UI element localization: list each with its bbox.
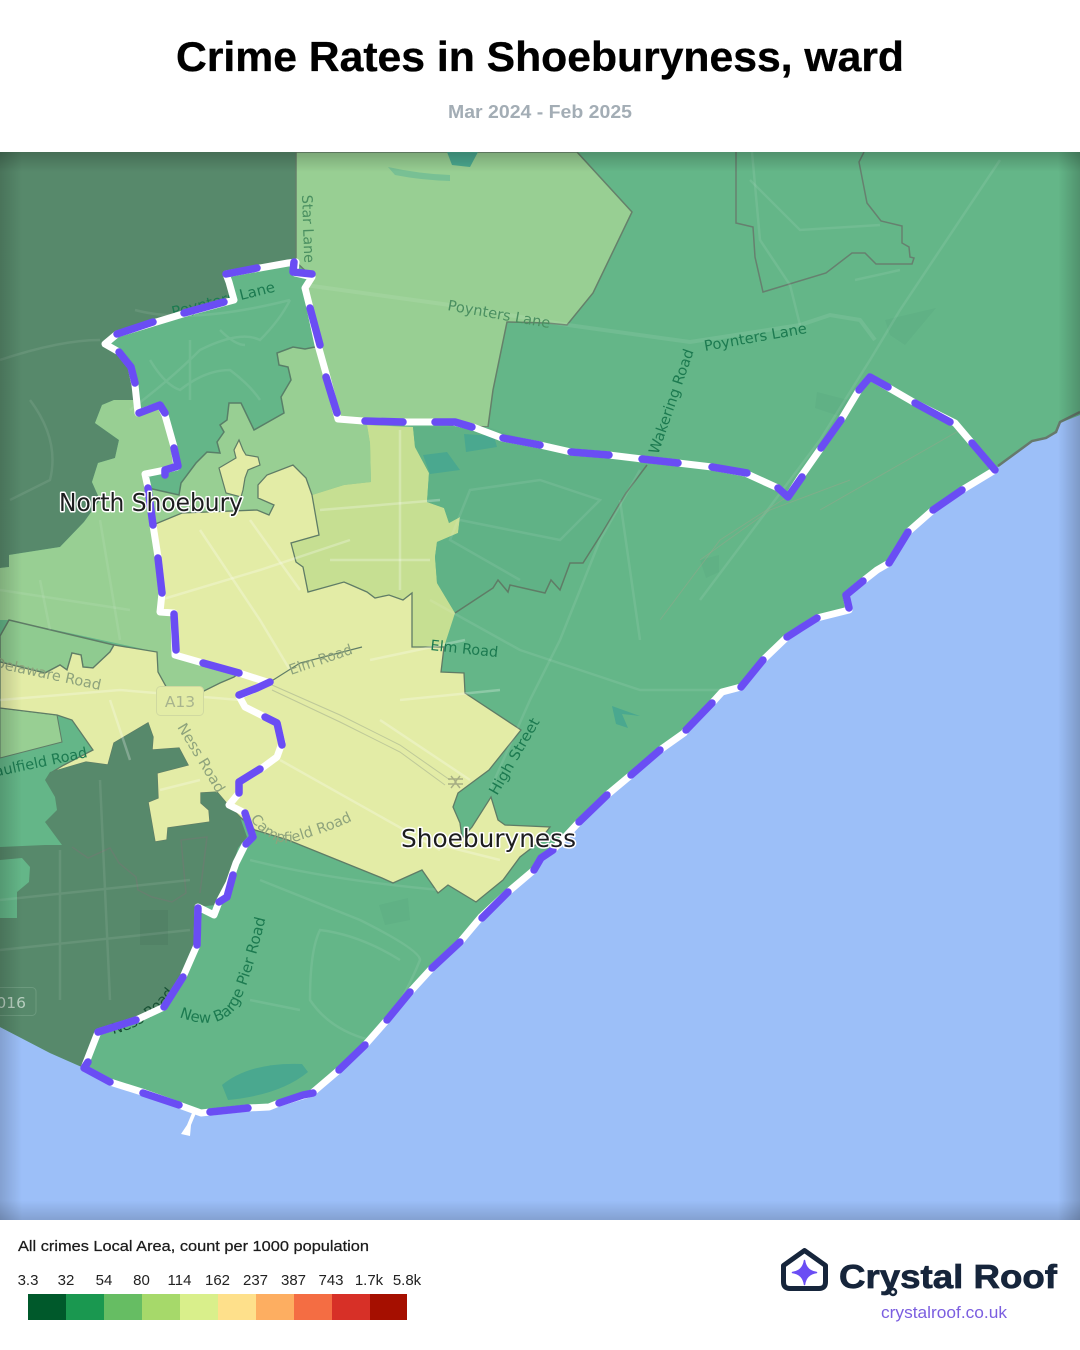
road label: Star Lane: Star Lane	[298, 195, 316, 263]
area: darker woodland patch	[140, 910, 168, 945]
road label: Poynters Lane centre: Poynters Lane	[446, 298, 552, 332]
place label: Shoeburyness: Shoeburyness	[401, 824, 576, 853]
legend title: All crimes Local Area, count per 1000 population	[18, 1238, 369, 1255]
area: pond north	[388, 167, 450, 181]
road label: High Street: High Street	[487, 715, 544, 798]
legend tick labels: 1.7k	[355, 1272, 384, 1289]
road label: Elm Road west: Elm Road	[287, 642, 355, 679]
ward boundary purple dashes	[84, 262, 995, 1112]
streets on yellow areas	[0, 430, 500, 860]
ferry pier	[181, 1113, 196, 1136]
area: light green North Shoebury	[0, 347, 371, 693]
road label: Poynters Lane west: Poynters Lane	[170, 280, 277, 321]
logo wordmark y-tail dot	[890, 1289, 896, 1295]
legend tick labels: 3.3	[18, 1272, 38, 1289]
legend tick labels: 162	[205, 1272, 230, 1289]
area: light green south-west strip	[0, 620, 114, 673]
map panel	[0, 152, 1080, 1220]
legend tick labels: 32	[58, 1272, 74, 1289]
road shield: 016	[0, 988, 36, 1016]
area boundary: central green edge	[455, 465, 647, 613]
area: green patch inside dark zone	[0, 858, 30, 918]
road label: Campfield Road: Campfield Road	[252, 811, 351, 844]
Elm Road boundary line	[270, 647, 362, 682]
area: darker green land patches	[379, 308, 936, 925]
area: light green west of Caulfield Road	[0, 708, 62, 758]
icon: railway station	[448, 776, 463, 788]
sea	[0, 415, 1080, 1220]
title: Crime Rates in Shoeburyness, ward	[176, 33, 904, 80]
legend tick labels: 387	[281, 1272, 306, 1289]
logo wordmark: Crystal Roof	[839, 1258, 1058, 1295]
area: pale yellow main	[0, 465, 550, 902]
subtitle: date range: Mar 2024 - Feb 2025	[448, 101, 632, 122]
area: teal patches	[222, 152, 640, 1100]
legend tick labels: 114	[168, 1272, 191, 1289]
coast edge at north-east	[998, 412, 1080, 466]
area: light green north of ward	[296, 152, 632, 427]
icon: house with sparkle	[784, 1250, 826, 1288]
map vignette	[0, 152, 1080, 1220]
legend tick labels: 54	[96, 1272, 112, 1289]
road shield: A13: A13	[165, 693, 195, 711]
road label: Wakering Road: Wakering Road	[647, 347, 698, 456]
legend tick labels: 743	[318, 1272, 344, 1289]
road label: Ness Road south: Ness Road	[112, 987, 170, 1034]
legend tick labels: 237	[243, 1272, 268, 1289]
road label: Ness Road: Ness Road	[174, 721, 227, 796]
logo: Crystal Roof	[784, 1250, 1058, 1322]
legend colour scale	[28, 1294, 407, 1320]
area: dark green top-left	[0, 152, 296, 568]
ward boundary	[84, 262, 995, 1113]
road label: New Barge Pier Road: New Barge Pier Road	[180, 917, 266, 1023]
map base: medium green land	[0, 152, 1080, 1110]
ward boundary white outline	[84, 262, 995, 1113]
legend tick labels: 5.8k	[393, 1272, 422, 1289]
area: pale yellow island	[219, 440, 260, 497]
area: darker green east of centre	[413, 427, 489, 613]
legend tick labels	[18, 1272, 422, 1289]
road label: Elm Road east: Elm Road	[430, 638, 499, 661]
legend	[18, 1238, 422, 1320]
legend tick labels: 80	[133, 1272, 150, 1289]
area: yellow-green central	[291, 425, 460, 647]
area: dark green south-west	[0, 723, 247, 1068]
logo url: crystalroof.co.uk	[881, 1303, 1008, 1322]
road label: Poynters Lane east: Poynters Lane	[703, 321, 808, 355]
road shield: A13	[156, 686, 204, 716]
railway lines	[272, 430, 960, 785]
road network	[0, 152, 1000, 1040]
area outline: inner green zone edge	[148, 347, 315, 495]
place label: North Shoebury: North Shoebury	[59, 488, 243, 517]
area outlines	[72, 152, 914, 902]
